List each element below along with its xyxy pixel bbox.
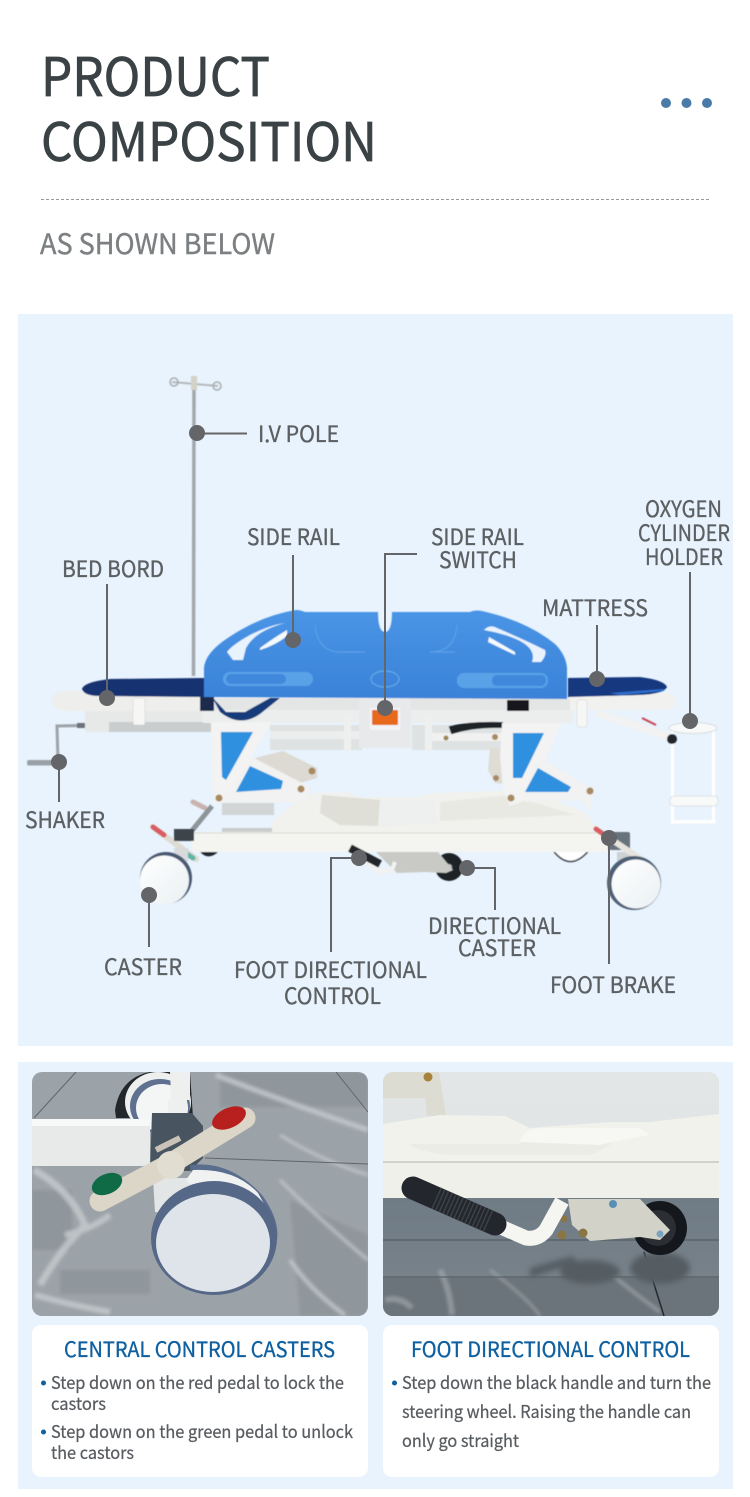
label: directional caster: DIRECTIONAL — [428, 909, 561, 941]
shadow — [530, 1252, 690, 1284]
label: oxygen cylinder holder: OXYGEN — [645, 492, 722, 524]
base basin — [272, 790, 600, 833]
mattress — [82, 677, 667, 697]
pedal — [100, 1118, 245, 1201]
small wheel — [633, 1201, 687, 1255]
trays — [52, 691, 203, 711]
panel: product diagram — [18, 314, 733, 1046]
label: foot directional control — [234, 953, 427, 1011]
bullet text — [392, 1370, 711, 1453]
lower cross bars — [222, 803, 274, 815]
label: mattress: MATTRESS — [542, 591, 648, 623]
label: directional caster: CASTER — [458, 931, 536, 963]
right caster and brake — [596, 829, 661, 910]
panel: details — [18, 1062, 733, 1489]
label: IV pole: I.V POLE — [258, 417, 339, 449]
strap — [212, 697, 280, 721]
post — [170, 1072, 190, 1102]
crank — [57, 725, 108, 762]
bullets text: the castors — [51, 1440, 134, 1465]
lift bracket right — [488, 748, 512, 785]
black grip — [413, 1188, 495, 1224]
directional caster — [350, 848, 463, 881]
label: oxygen cylinder holder — [638, 492, 730, 572]
tray — [383, 1114, 719, 1162]
right rail handle — [484, 626, 546, 662]
oxygen holder — [597, 713, 718, 824]
label: side rail switch: SIDE RAIL — [431, 520, 524, 552]
title: PRODUCT — [41, 36, 270, 112]
stretcher illustration — [27, 376, 718, 910]
left brake pedal — [153, 802, 212, 859]
left leg — [211, 722, 272, 805]
heading: FOOT DIRECTIONAL CONTROL — [411, 1334, 690, 1364]
bullet text: only go straight — [402, 1428, 519, 1453]
label: side rail switch: SWITCH — [439, 543, 517, 575]
white bar — [32, 1126, 150, 1166]
left caster — [140, 848, 192, 904]
label: foot directional control: FOOT DIRECTIONAL — [234, 953, 427, 985]
right leg — [500, 723, 562, 806]
bullets text: Step down on the green pedal to unlock — [51, 1419, 353, 1444]
rail slots — [223, 672, 313, 686]
title: COMPOSITION — [41, 101, 377, 177]
label: shaker: SHAKER — [25, 803, 105, 835]
dark block — [150, 1113, 203, 1171]
label: side rail: SIDE RAIL — [247, 520, 340, 552]
leader lines and dots — [51, 425, 698, 964]
photo: foot directional control — [383, 1072, 719, 1316]
back casters — [194, 838, 220, 856]
title — [41, 36, 377, 177]
handle tube — [494, 1201, 562, 1238]
label: oxygen cylinder holder: HOLDER — [645, 540, 723, 572]
left rail handle — [227, 623, 285, 660]
bullet text: Step down the black handle and turn the — [402, 1370, 711, 1395]
heading: CENTRAL CONTROL CASTERS — [64, 1334, 335, 1364]
caster — [153, 1178, 192, 1212]
card: central control casters — [32, 1325, 368, 1477]
bullets text — [41, 1370, 353, 1465]
lift bracket left — [255, 751, 317, 786]
upper frame — [85, 711, 212, 732]
bullets text: Step down on the red pedal to lock the — [51, 1370, 344, 1395]
back wheel — [115, 1072, 193, 1118]
card: foot directional control — [383, 1325, 719, 1477]
bullet text: steering wheel. Raising the handle can — [402, 1399, 691, 1424]
base bar — [190, 832, 612, 852]
decorative three dots — [661, 98, 712, 108]
photo: central control caster — [32, 1072, 368, 1316]
side rail — [204, 610, 567, 699]
upper frame bracket — [383, 1072, 446, 1116]
label: bed board: BED BORD — [62, 552, 164, 584]
label: foot directional control: CONTROL — [284, 979, 381, 1011]
label: side rail switch — [431, 520, 524, 575]
bullets text: castors — [51, 1391, 106, 1416]
bracket — [568, 1199, 670, 1241]
IV pole — [170, 376, 221, 676]
switch box — [359, 698, 411, 748]
label: foot brake: FOOT BRAKE — [550, 968, 676, 1000]
label: caster: CASTER — [104, 950, 182, 982]
subtitle: AS SHOWN BELOW — [40, 223, 275, 263]
label: directional caster — [428, 909, 561, 963]
label: oxygen cylinder holder: CYLINDER — [638, 516, 730, 548]
